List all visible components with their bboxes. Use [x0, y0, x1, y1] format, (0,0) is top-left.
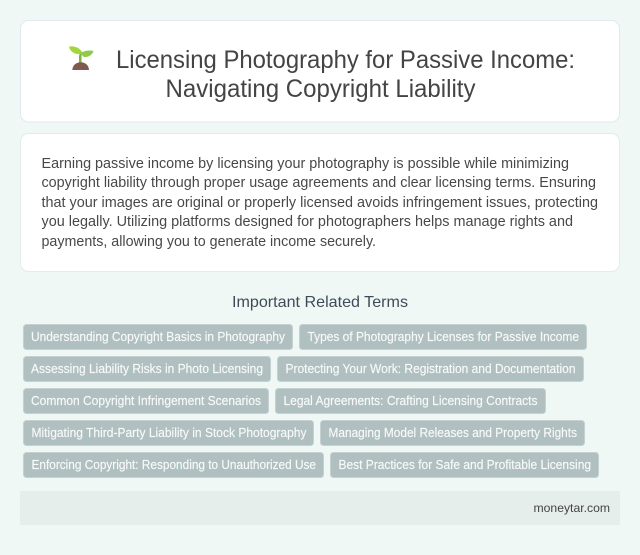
tag: Types of Photography Licenses	[300, 324, 586, 350]
tag: Best Practices	[330, 452, 598, 478]
tag: Types of Photography Licenses: Types of Photography Licenses for Passive Income	[308, 330, 579, 344]
tag: Managing Model Releases: Managing Model Releases and Property Rights	[328, 426, 577, 440]
panel: intro paragraph	[20, 134, 620, 272]
heading: title: Licensing Photography for Passive Income:	[116, 47, 575, 74]
tag: Mitigating Third-Party Liability: Mitigating Third-Party Liability in Stock Photography	[32, 426, 307, 440]
icon: seedling	[69, 46, 94, 70]
tag: Best Practices: Best Practices for Safe and Profitable Licensing	[338, 458, 591, 472]
tag: Common Copyright Infringement: Common Copyright Infringement Scenarios	[31, 394, 261, 408]
text block: paragraph: copyright liability through proper usage agreements and clear licensing terms. Ensuring	[42, 175, 596, 191]
text block: paragraph	[42, 156, 598, 250]
tag: Enforcing Copyright	[24, 452, 324, 478]
tag: Managing Model Releases	[320, 420, 584, 446]
heading: Important Related Terms: Important Related Terms	[232, 294, 408, 311]
panel: title card	[20, 20, 620, 122]
tag: Legal Agreements	[276, 388, 546, 414]
text block: paragraph: that your images are original or properly licensed avoids infringement issues, protecting	[42, 195, 598, 211]
tag: Protecting Your Work: Protecting Your Work: Registration and Documentation	[286, 362, 576, 376]
tag: Protecting Your Work	[278, 356, 584, 382]
tag: Enforcing Copyright: Enforcing Copyright: Responding to Unauthorized Use	[32, 458, 316, 472]
tag: Common Copyright Infringement	[24, 388, 268, 414]
footer bar	[20, 491, 620, 525]
heading: title: Navigating Copyright Liability	[166, 76, 476, 103]
tag: Assessing Liability Risks	[24, 356, 270, 382]
tag: Legal Agreements: Legal Agreements: Crafting Licensing Contracts	[284, 394, 538, 408]
footer: site name: moneytar.com	[534, 501, 610, 515]
tag: Understanding Copyright Basics	[24, 324, 292, 350]
text block: paragraph: you legally. Utilizing platforms designed for photographers helps manage rights and	[42, 214, 573, 230]
tag: Assessing Liability Risks: Assessing Liability Risks in Photo Licensing	[31, 362, 263, 376]
text block: paragraph: Earning passive income by licensing your photography is possible while minimizing	[42, 156, 569, 172]
tag: Mitigating Third-Party Liability	[24, 420, 314, 446]
heading: title	[116, 47, 575, 103]
tag list	[24, 324, 598, 478]
text block: paragraph: payments, allowing you to generate income securely.	[42, 234, 376, 250]
tag: Understanding Copyright Basics: Understanding Copyright Basics in Photography	[31, 330, 286, 344]
